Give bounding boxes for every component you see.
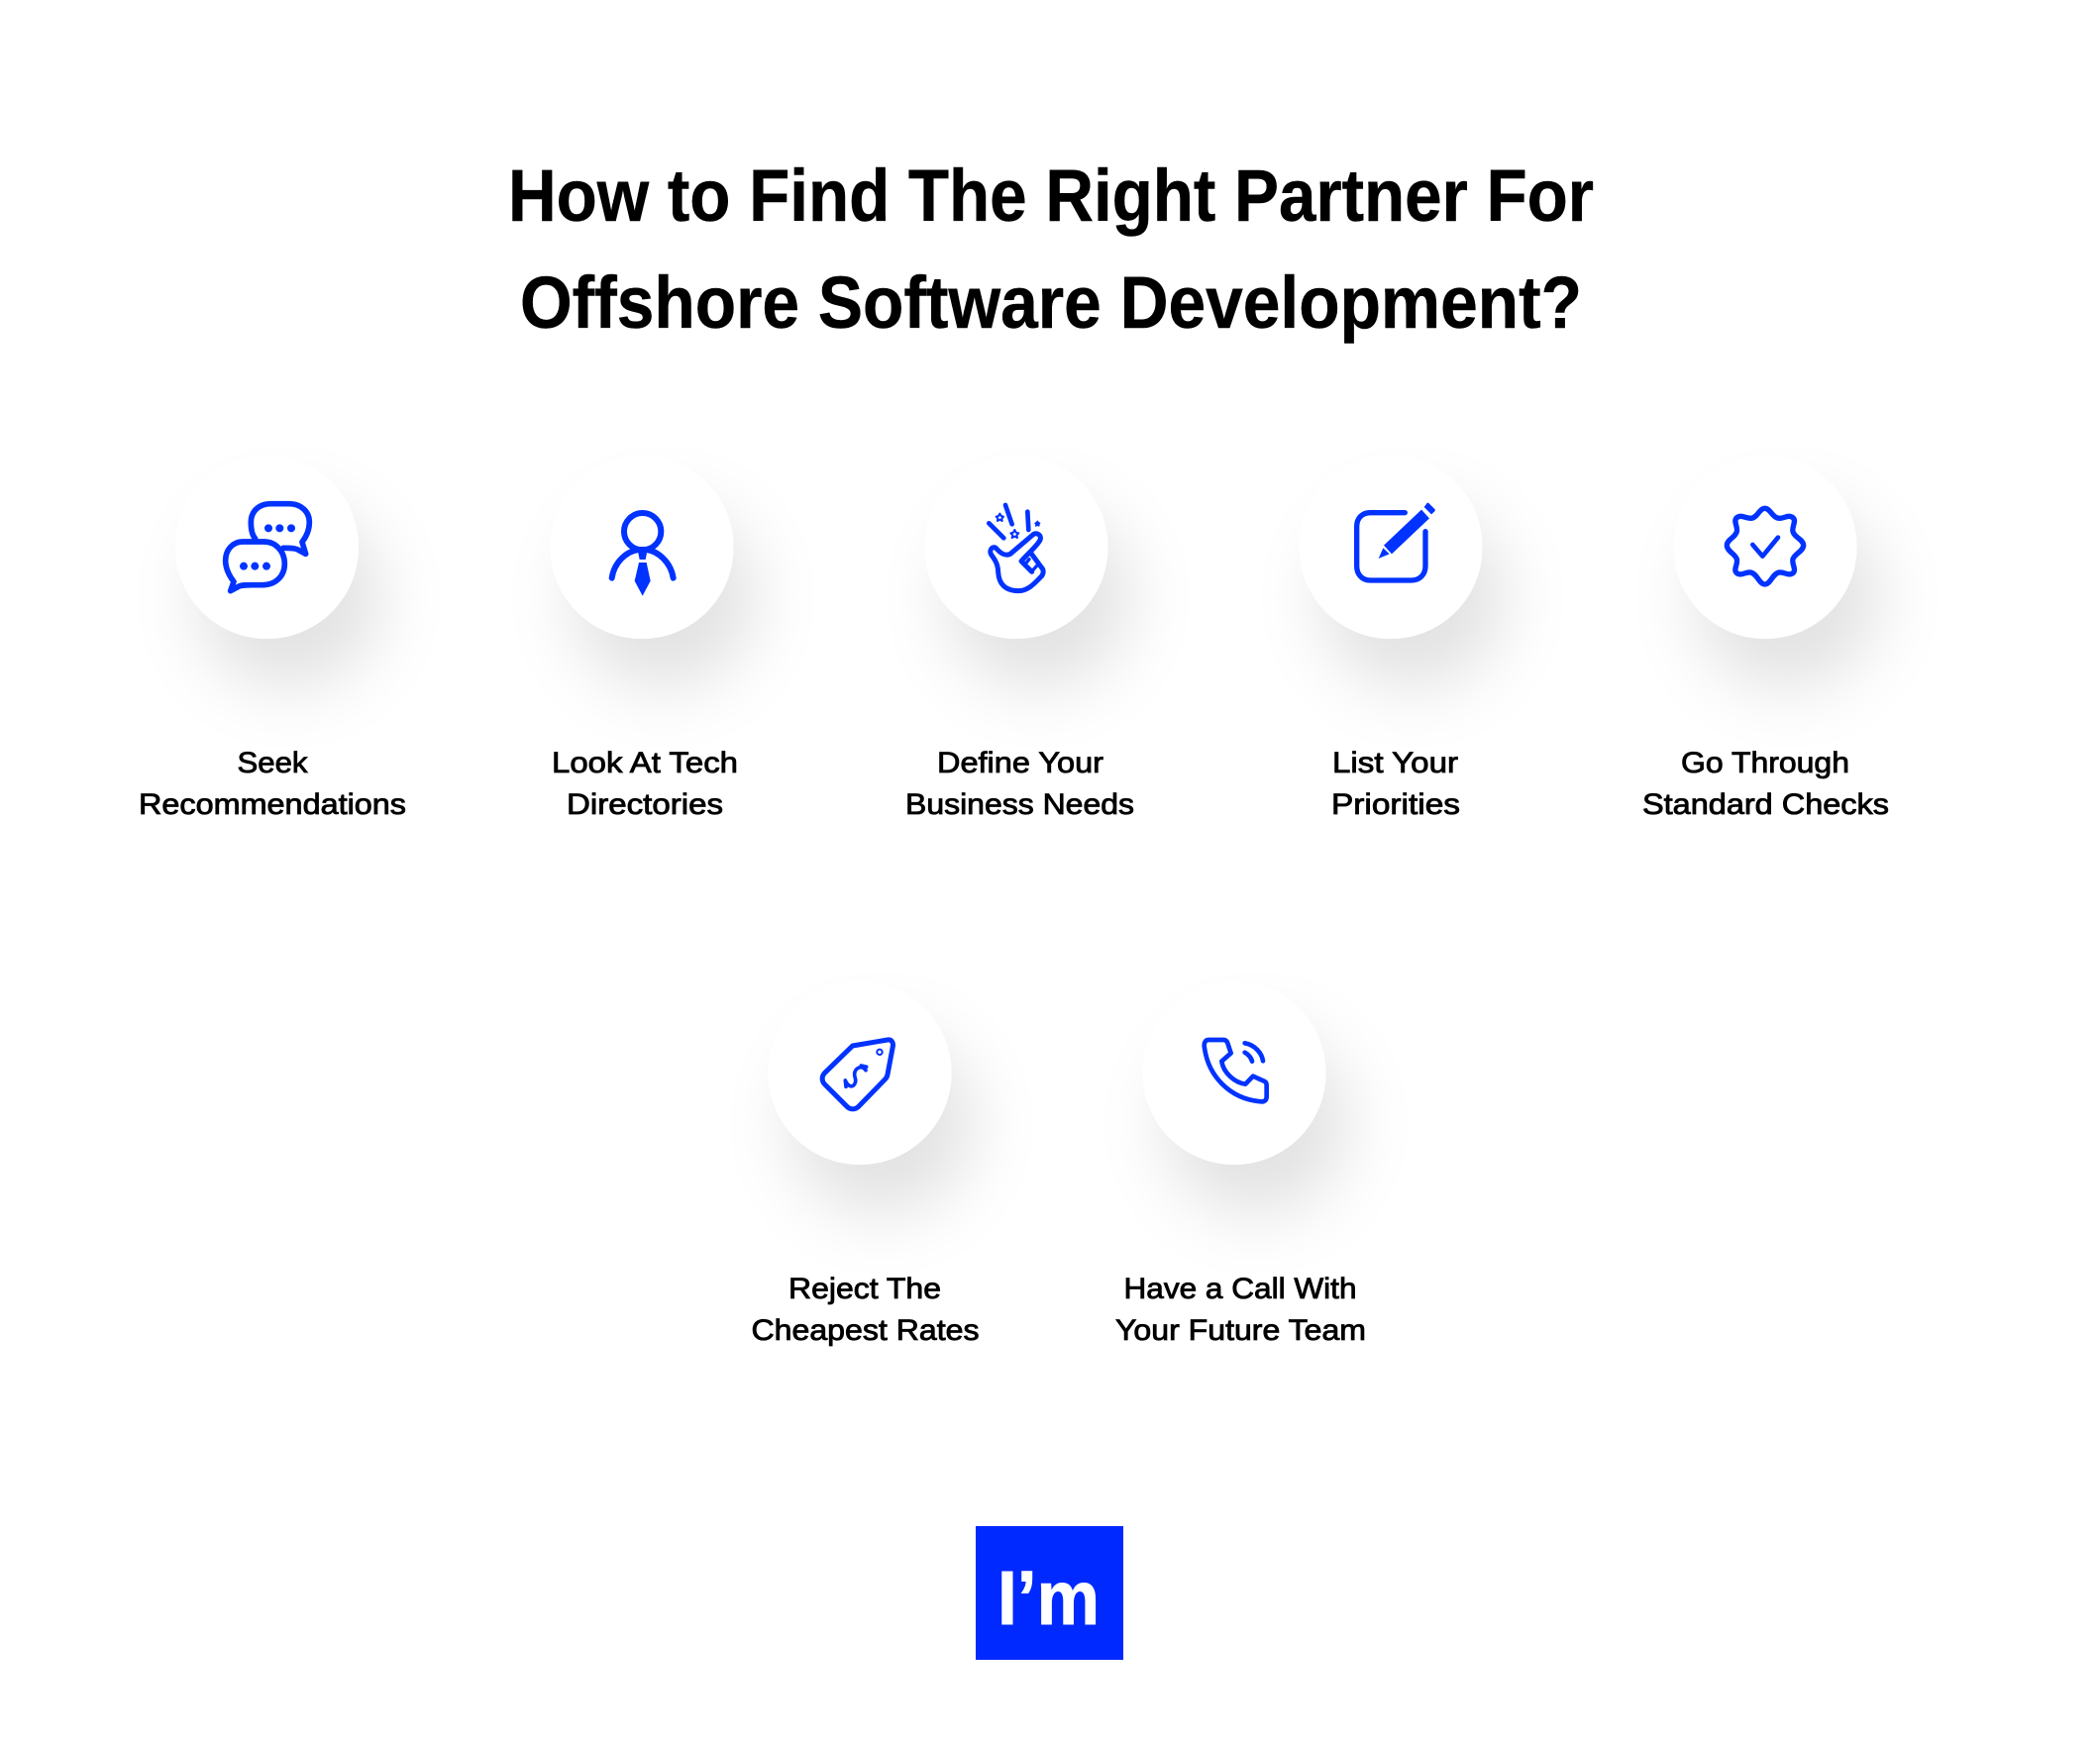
label: Define Your	[937, 747, 1103, 779]
label	[905, 747, 1134, 821]
step: List Your Priorities	[1300, 456, 1482, 821]
icon: note and pencil	[1357, 503, 1435, 580]
icon circle	[1674, 456, 1856, 639]
icon circle	[769, 981, 951, 1165]
label: Business Needs	[905, 788, 1134, 821]
label: Go Through	[1681, 747, 1849, 779]
icon circle	[551, 456, 733, 639]
icon: check badge	[1727, 508, 1804, 584]
label: Look At Tech	[552, 747, 738, 779]
label: Priorities	[1331, 788, 1460, 821]
label: Your Future Team	[1115, 1314, 1366, 1347]
label	[139, 747, 406, 821]
icon circle	[1300, 456, 1482, 639]
label	[552, 747, 738, 821]
label	[1331, 747, 1460, 821]
logo: I’m	[998, 1556, 1100, 1641]
label	[751, 1273, 979, 1347]
icon: phone	[1205, 1040, 1267, 1101]
step: Reject The Cheapest Rates	[751, 981, 979, 1347]
label: Cheapest Rates	[751, 1314, 979, 1347]
title	[508, 154, 1594, 344]
icon circle	[1143, 981, 1325, 1165]
title: Offshore Software Development?	[520, 261, 1582, 344]
step: Look At Tech Directories	[551, 456, 738, 821]
label: Standard Checks	[1642, 788, 1889, 821]
label: Recommendations	[139, 788, 406, 821]
step: Have a Call With Your Future Team	[1115, 981, 1366, 1347]
icon: person with tie	[612, 513, 674, 596]
icon: chat bubbles	[226, 504, 309, 591]
icon: price tag	[822, 1040, 892, 1109]
step: Go Through Standard Checks	[1642, 456, 1889, 821]
label: Have a Call With	[1123, 1273, 1357, 1305]
title: How to Find The Right Partner For	[508, 154, 1594, 237]
label	[1642, 747, 1889, 821]
step: Define Your Business Needs	[905, 456, 1134, 821]
icon: finger snap	[989, 505, 1043, 591]
label: Reject The	[788, 1273, 941, 1305]
label: Seek	[238, 747, 309, 779]
step: Seek Recommendations	[139, 456, 406, 821]
label: List Your	[1332, 747, 1458, 779]
logo	[976, 1526, 1123, 1660]
label: Directories	[567, 788, 723, 821]
icon circle	[925, 456, 1107, 639]
label	[1115, 1273, 1366, 1347]
icon circle	[175, 456, 359, 639]
